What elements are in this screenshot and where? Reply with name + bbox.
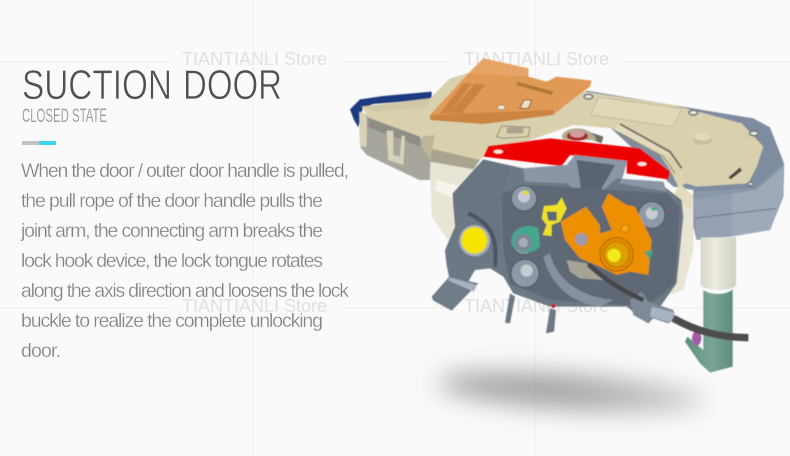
watermarks: TIANTIANLI Store	[464, 296, 609, 316]
watermarks: TIANTIANLI Store	[182, 296, 327, 316]
description text: lock hook device, the lock tongue rotates	[21, 250, 323, 272]
lock body	[445, 155, 683, 323]
mid clip	[497, 126, 530, 138]
round sockets panel	[502, 185, 680, 307]
green clip	[644, 250, 653, 260]
grey left housing	[359, 112, 431, 180]
orange latch	[561, 193, 652, 275]
watermarks: TIANTIANLI Store	[182, 49, 327, 69]
rim	[578, 91, 784, 240]
cable	[588, 264, 643, 300]
left hose	[468, 213, 496, 267]
description text: door.	[21, 340, 61, 362]
sockets	[511, 186, 665, 287]
title: DOOR	[183, 61, 282, 108]
raised plate	[591, 97, 682, 127]
pink screw	[567, 131, 588, 141]
pins	[505, 293, 515, 323]
cable clip	[630, 292, 675, 323]
description text: along the axis direction and loosens the lock	[21, 280, 349, 302]
subtitle: CLOSED STATE	[22, 106, 107, 127]
illustration: door lock	[350, 58, 784, 373]
right bumper	[693, 164, 784, 239]
grey curved rib	[543, 253, 613, 307]
red plate	[483, 138, 670, 179]
lower assembly	[432, 155, 748, 373]
orange plate	[430, 58, 592, 124]
watermarks	[182, 49, 609, 316]
beige top	[362, 72, 763, 187]
blue handle	[350, 92, 432, 127]
ground shadow	[436, 366, 708, 418]
watermarks: TIANTIANLI Store	[464, 49, 609, 69]
green column	[685, 289, 733, 373]
green spring	[511, 226, 540, 253]
description text: buckle to realize the complete unlocking	[21, 310, 323, 332]
description text: the pull rope of the door handle pulls the	[21, 190, 323, 212]
left tab	[445, 247, 468, 282]
description text: joint arm, the connecting arm breaks the	[20, 220, 323, 242]
description text: When the door / outer door handle is pulled,	[21, 160, 349, 182]
lock housing upper	[350, 58, 784, 303]
small screws	[584, 94, 758, 186]
description text	[20, 160, 349, 362]
title: SUCTION	[22, 61, 172, 108]
post	[693, 135, 712, 145]
big yellow button	[459, 225, 490, 256]
cream lower body	[430, 160, 693, 303]
slot	[613, 123, 693, 210]
accent bar	[22, 141, 56, 145]
yellow clip	[542, 197, 567, 236]
tan column	[701, 237, 736, 290]
